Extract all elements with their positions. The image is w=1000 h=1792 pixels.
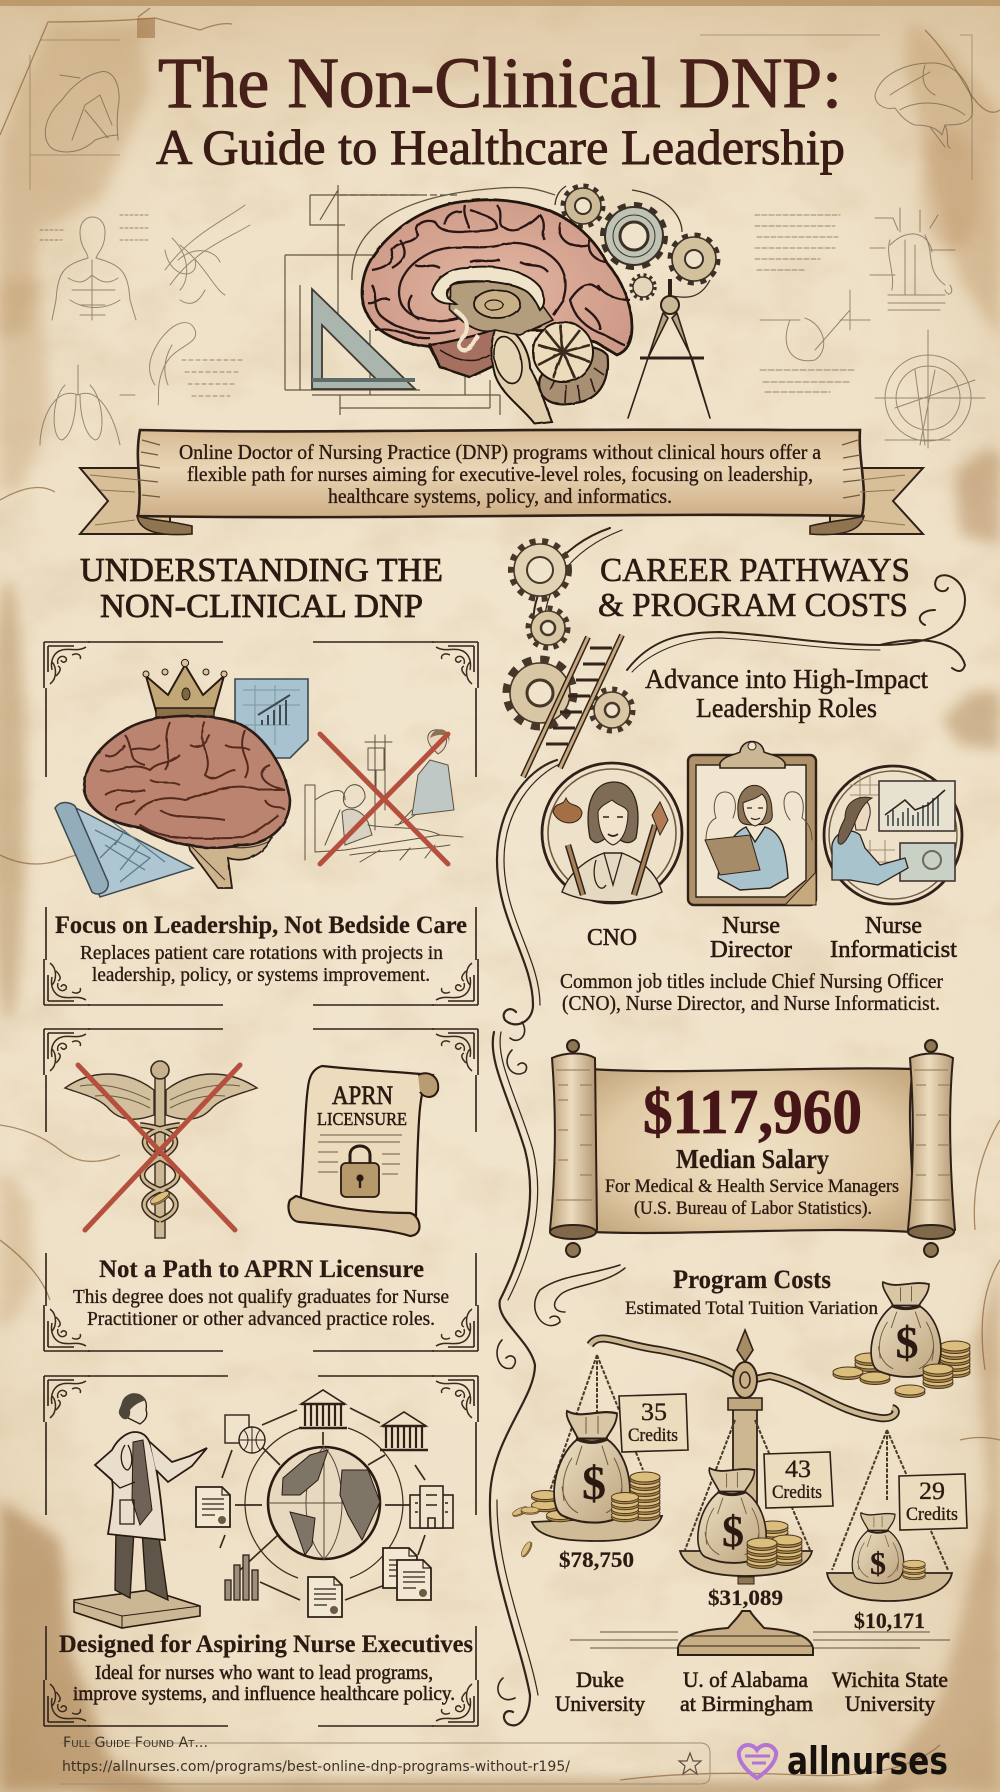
focus text: Focus on Leadership, Not Bedside Care <box>55 912 467 939</box>
role labels: CNO <box>587 925 637 951</box>
salary text <box>605 1076 899 1219</box>
icon: blueprint scroll <box>55 802 193 897</box>
program costs heading <box>625 1265 878 1319</box>
anatomical sketches, left <box>40 72 250 445</box>
heading: career pathways <box>598 552 910 624</box>
icon: crown <box>143 659 227 717</box>
salary text: (U.S. Bureau of Labor Statistics). <box>634 1198 872 1219</box>
job titles text: (CNO), Nurse Director, and Nurse Informaticist. <box>562 991 940 1015</box>
scale pan: alabama: $ <box>722 1507 744 1556</box>
title <box>156 43 845 175</box>
role: nurse informaticist portrait <box>824 766 962 904</box>
icon: caduceus crossed out <box>65 1061 257 1238</box>
aprn text: This degree does not qualify graduates for Nurse <box>73 1286 449 1308</box>
subheading: leadership roles <box>645 664 928 723</box>
role: nurse director portrait <box>688 742 816 905</box>
icon: bar chart <box>225 1555 258 1600</box>
scale pan: duke <box>149 1189 688 1572</box>
panel: not a path to aprn <box>44 1029 478 1351</box>
executive text: Designed for Aspiring Nurse Executives <box>59 1631 473 1658</box>
role: cno portrait <box>542 763 682 903</box>
intro text <box>179 440 822 508</box>
credits tag: Credits <box>628 1425 678 1446</box>
scale stand <box>570 1330 950 1655</box>
aprn text: Practitioner or other advanced practice roles. <box>87 1308 435 1330</box>
scale pan: wichita: $ <box>870 1545 886 1581</box>
icon: compass <box>628 279 710 418</box>
icon: banks <box>299 1390 428 1450</box>
university labels: University <box>555 1691 645 1716</box>
credits tag <box>619 1394 688 1452</box>
credits tag: 35 <box>641 1399 667 1426</box>
university labels: at Birmingham <box>680 1691 813 1716</box>
icon: gears <box>555 186 718 299</box>
scroll label: APRN <box>332 1081 393 1110</box>
university labels <box>555 1667 948 1716</box>
university labels: Duke <box>576 1667 624 1692</box>
program costs heading: Program Costs <box>673 1265 831 1294</box>
salary text: $117,960 <box>643 1076 862 1147</box>
role labels: Director <box>710 937 792 963</box>
role labels: Nurse <box>865 913 922 939</box>
credits tag: Credits <box>772 1482 822 1503</box>
icon: set square <box>312 289 415 389</box>
role labels: Informaticist <box>830 937 957 963</box>
credits tag: 43 <box>785 1456 811 1483</box>
scroll label <box>317 1081 407 1129</box>
frame <box>44 1029 478 1351</box>
wordmark: allnurses <box>787 1739 948 1783</box>
illustration: brain <box>362 200 632 424</box>
aprn text: Not a Path to APRN Licensure <box>99 1256 424 1283</box>
executive text: improve systems, and influence healthcare policy. <box>73 1683 455 1705</box>
subheading: leadership roles: Advance into High-Impact <box>645 664 928 694</box>
icon: money bag with coins <box>833 1282 970 1398</box>
icon: star <box>679 1753 701 1774</box>
footer: guide link <box>60 1735 710 1784</box>
scale pan: duke: $ <box>582 1457 606 1510</box>
scale pan: alabama <box>680 1420 833 1610</box>
job titles text: Common job titles include Chief Nursing Officer <box>560 969 943 993</box>
heading: understanding <box>80 552 443 625</box>
panel: aspiring nurse executives <box>44 1376 478 1726</box>
icon: brain with crown <box>84 716 290 888</box>
title: The Non-Clinical DNP: <box>158 43 842 123</box>
title: A Guide to Healthcare Leadership <box>156 119 845 175</box>
executive text <box>59 1631 473 1705</box>
footer label: Full Guide Found At... <box>63 1735 208 1751</box>
icon: document and globe <box>225 1415 265 1453</box>
price: $10,171 <box>854 1608 925 1633</box>
balance scale <box>570 1330 950 1655</box>
job titles text <box>560 969 943 1015</box>
role labels: Nurse <box>722 913 780 939</box>
left roller <box>550 1040 597 1257</box>
icon: gears and ladder <box>506 541 633 777</box>
price: $78,750 <box>559 1547 634 1572</box>
intro text: Online Doctor of Nursing Practice (DNP) programs without clinical hours offer a <box>179 440 822 464</box>
anatomical sketches, right <box>755 63 985 448</box>
university labels: University <box>845 1691 935 1716</box>
heading: career pathways: CAREER PATHWAYS <box>600 552 910 589</box>
focus text: leadership, policy, or systems improvement. <box>92 964 430 986</box>
frame <box>44 642 478 1005</box>
frame <box>44 1376 478 1726</box>
diagram: globe and policy network <box>196 1390 453 1617</box>
logo: allnurses <box>739 1739 948 1783</box>
salary text: Median Salary <box>676 1144 829 1174</box>
focus text: Replaces patient care rotations with projects in <box>80 942 443 964</box>
heading: understanding: NON-CLINICAL DNP <box>100 588 423 625</box>
icon: documents <box>196 1487 431 1617</box>
university labels: U. of Alabama <box>683 1667 808 1692</box>
decorative vine and flourishes <box>490 528 965 1725</box>
right roller <box>908 1040 955 1257</box>
credits tag: Credits <box>906 1504 958 1525</box>
credits tag <box>764 1452 833 1508</box>
icon: money bag with coins: $ <box>896 1317 918 1368</box>
heading: career pathways: & PROGRAM COSTS <box>598 587 908 624</box>
focus text <box>55 912 467 986</box>
scale beam <box>590 1339 896 1418</box>
program costs heading: Estimated Total Tuition Variation <box>625 1298 878 1319</box>
scale pan: wichita <box>827 1430 967 1633</box>
footer url: https://allnurses.com/programs/best-online-dnp-programs-without-r195/ <box>62 1759 570 1775</box>
intro banner <box>80 430 923 535</box>
illustration: patient care crossed out <box>305 729 463 864</box>
credits tag <box>899 1474 967 1530</box>
hero illustration: drafting lines <box>285 185 555 415</box>
aprn text <box>73 1256 449 1330</box>
executive text: Ideal for nurses who want to lead programs, <box>95 1662 433 1684</box>
intro text: flexible path for nurses aiming for executive-level roles, focusing on leadership, <box>187 462 813 486</box>
icon: blue chart <box>235 679 308 758</box>
salary scroll <box>550 1040 955 1257</box>
university labels: Wichita State <box>832 1667 948 1692</box>
icon: hospital <box>410 1486 453 1528</box>
icon: aprn licensure scroll <box>288 1066 438 1236</box>
price: $31,089 <box>708 1585 783 1610</box>
illustration: nurse executive <box>74 1393 207 1628</box>
intro text: healthcare systems, policy, and informatics. <box>328 484 672 508</box>
role labels <box>587 913 957 963</box>
scroll label: LICENSURE <box>317 1109 407 1129</box>
icon: heart <box>739 1745 776 1778</box>
salary text: For Medical & Health Service Managers <box>605 1176 899 1197</box>
credits tag: 29 <box>919 1478 945 1505</box>
subheading: leadership roles: Leadership Roles <box>696 693 877 723</box>
heading: understanding: UNDERSTANDING THE <box>80 552 443 589</box>
panel: focus on leadership <box>44 642 478 1005</box>
